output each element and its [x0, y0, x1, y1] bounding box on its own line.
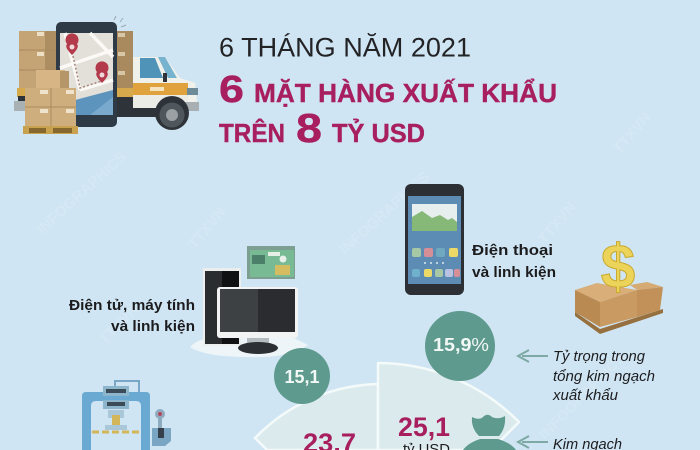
heading: six export items	[219, 69, 557, 151]
text: TTXVN	[610, 109, 655, 158]
text: TTXVN	[185, 204, 230, 253]
icon: delivery truck with phone map and boxes	[14, 16, 199, 134]
text: INFOGRAPHICS	[336, 168, 433, 258]
legend: share of total export turnover: tổng kim ngạch	[553, 369, 655, 385]
value: 25,1: 25,1	[398, 412, 450, 442]
icon: boxes with dollar sign	[575, 233, 663, 334]
label: phones and components: và linh kiện	[472, 265, 556, 281]
text: INFOGRAPHICS	[536, 349, 629, 443]
icon: money bag	[463, 415, 516, 450]
arrow: turnover legend	[518, 436, 548, 448]
icon: boxes with dollar sign: $	[601, 233, 635, 302]
heading: six export items: MẶT HÀNG XUẤT KHẨU	[254, 78, 557, 108]
heading: six export items: TỶ USD	[332, 118, 425, 148]
text: TTXVN	[535, 199, 580, 248]
chart sector: left	[255, 384, 378, 450]
label: electronics, computers and components: Điện tử, máy tính	[69, 298, 195, 314]
badge: 15,9%	[425, 311, 495, 381]
text: INFOGRAPHICS	[33, 148, 130, 238]
icon: smartphone	[405, 184, 464, 295]
text: TTXVN	[96, 301, 143, 348]
badge: 15,9%: 15,9%	[433, 335, 489, 355]
icon: computer with circuit board	[190, 246, 308, 357]
legend: share of total export turnover	[552, 349, 655, 404]
label: phones and components	[472, 243, 556, 281]
heading: six export items: TRÊN	[219, 118, 285, 148]
heading: six export items: 6	[219, 69, 244, 111]
label: electronics, computers and components	[69, 298, 195, 335]
label: electronics, computers and components: và linh kiện	[111, 319, 195, 335]
badge: 15,1: 15,1	[284, 367, 320, 387]
arrow: share legend	[518, 350, 548, 362]
title: period: 6 THÁNG NĂM 2021	[219, 32, 471, 62]
label: phones and components: Điện thoại	[472, 243, 553, 259]
icon: industrial press machine	[82, 381, 171, 450]
legend: share of total export turnover: Tỷ trọng trong	[553, 349, 645, 365]
chart sector: right	[378, 363, 519, 450]
legend: share of total export turnover: xuất khẩu	[552, 388, 618, 404]
badge: 15,1	[274, 348, 330, 404]
heading: six export items: 8	[296, 105, 322, 151]
